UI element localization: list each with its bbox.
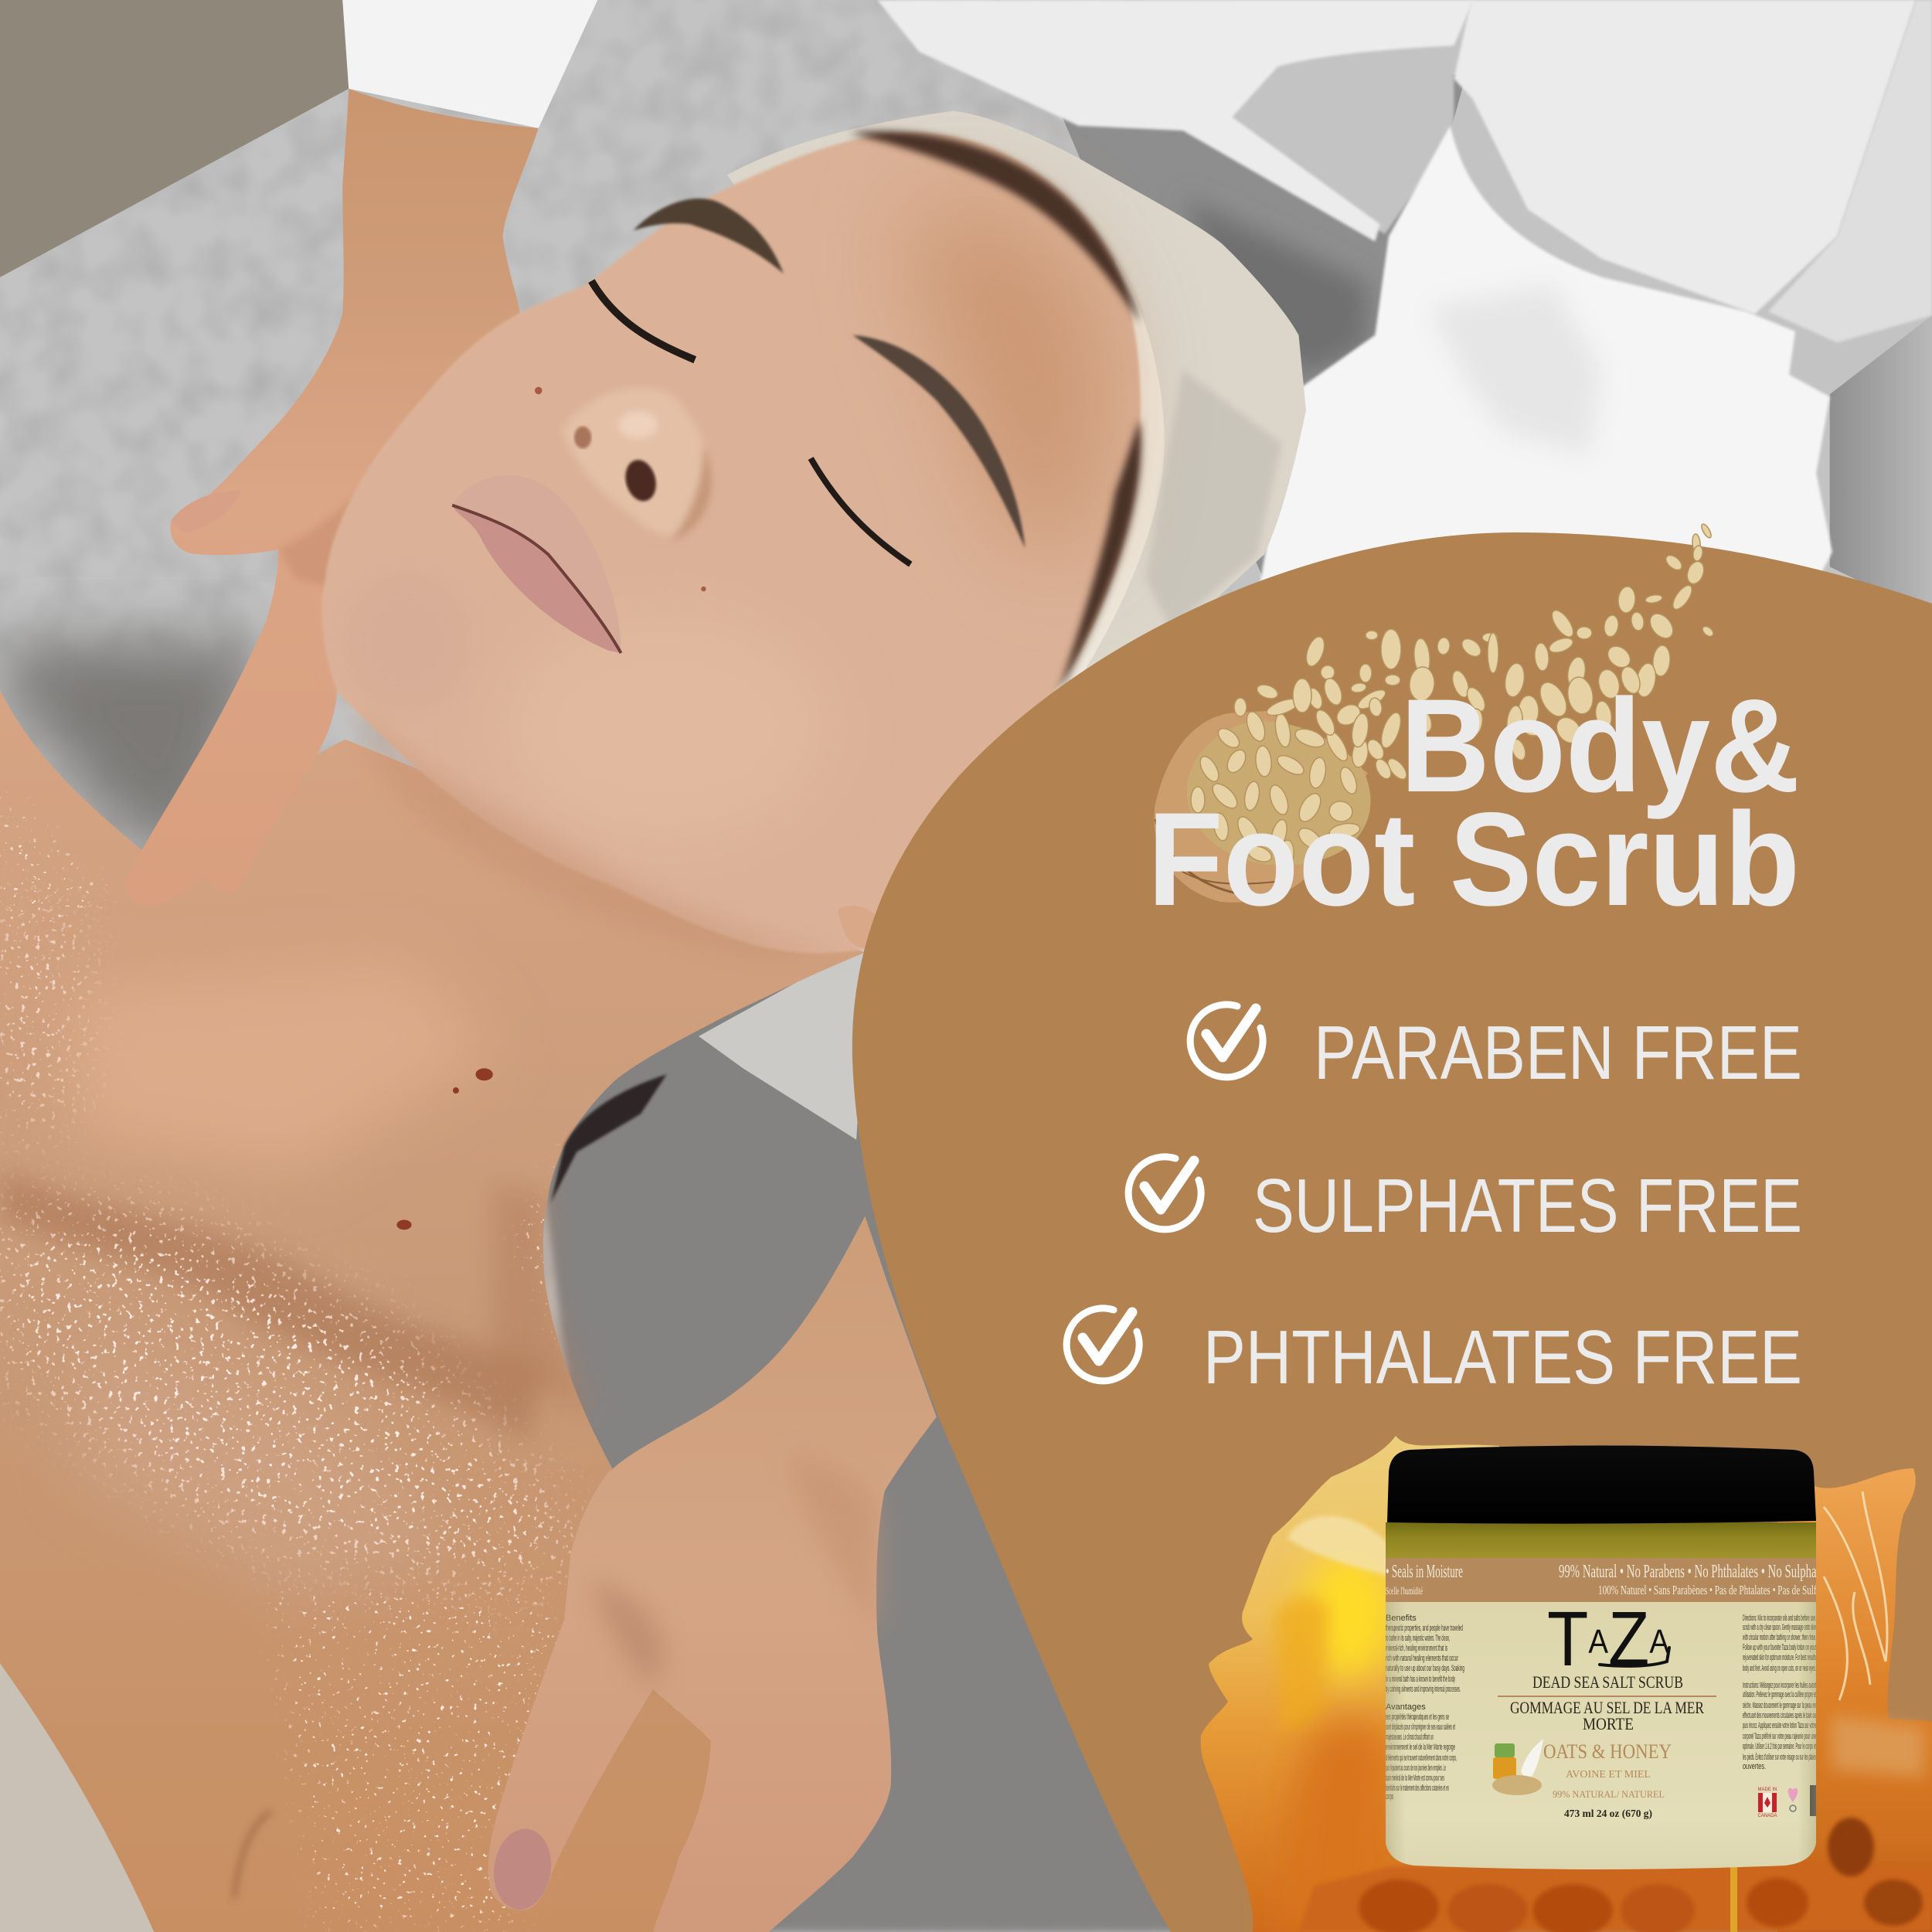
label band: • Seals in Moisture — [1386, 1562, 1463, 1582]
jar body: d'éléments qui se trouvent naturellement dans notre corps, — [1386, 1753, 1457, 1763]
French product name: GOMMAGE AU SEL DE LA MER — [1510, 1698, 1704, 1717]
coat lower sleeve — [1257, 126, 1832, 616]
speckles sparse — [0, 788, 740, 1932]
neck highlight — [74, 961, 493, 1171]
body: neck, chest and shoulder — [0, 690, 865, 1932]
Taza logo: A — [1649, 1623, 1670, 1661]
collarbone shadow — [0, 1171, 543, 1441]
oats in the bowl — [1187, 709, 1371, 869]
face — [322, 133, 1141, 953]
product jar — [1383, 1445, 1830, 1872]
honeycomb right — [1777, 1468, 1932, 1932]
masseuse lower hand and arm — [488, 1216, 937, 1932]
chest crease — [234, 1811, 271, 1897]
chest mid light — [74, 1331, 468, 1602]
masseuse sleeve — [342, 0, 597, 128]
jar body: qui s'épuisent au cours de nos journées bien remplies. Le — [1386, 1764, 1446, 1773]
Taza logo — [1547, 1596, 1670, 1682]
jar edge shading — [1383, 1602, 1820, 1872]
jar body: bienfaits sur le traitement des affections cutanées et en — [1386, 1784, 1449, 1793]
claim: sulphates free — [1128, 1157, 1802, 1248]
nostril left — [574, 427, 591, 448]
eyebrow right — [852, 335, 1026, 549]
jar body: sont déplacés pour s'imprégner de ses eaux salées et — [1386, 1723, 1455, 1732]
Made in Canada flag: MADE IN — [1757, 1787, 1777, 1792]
net weight: 473 ml 24 oz (670 g) — [1564, 1808, 1652, 1820]
jar body: naturally to use up about our busy days. Soaking — [1386, 1664, 1464, 1673]
coat recess deepest — [1183, 197, 1368, 376]
honey drip — [1730, 1862, 1737, 1932]
chin tone — [338, 566, 474, 715]
jar body: bain minéral de la Mer Morte est connu pour ses — [1386, 1774, 1444, 1783]
scrub speckles — [0, 788, 740, 1932]
flying oats — [1234, 522, 1715, 782]
natural claim: 99% NATURAL/ NATUREL — [1553, 1788, 1665, 1800]
label band: Scelle l'humidité — [1386, 1586, 1423, 1597]
left label column: Avantages — [1386, 1702, 1426, 1712]
coat right strip — [1768, 0, 1932, 342]
lips — [452, 475, 621, 653]
towel mottling — [0, 0, 1232, 1932]
product name: DEAD SEA SALT SCRUB — [1532, 1672, 1683, 1692]
neck right shading — [493, 1183, 591, 1417]
ear — [838, 906, 886, 948]
eyebrow left — [634, 199, 784, 274]
right label column — [1743, 1614, 1816, 1771]
illustration: honeycomb behind jar — [1201, 1436, 1932, 1932]
jar body: to bathe in its salty, majestic waters. The clean, — [1386, 1634, 1450, 1643]
closed eye right — [811, 458, 910, 564]
wrap ribbed inner band — [1047, 259, 1165, 709]
claim: sulphates free: SULPHATES FREE — [1253, 1163, 1802, 1248]
jar body: ses propriétés thérapeutiques et les gens se — [1386, 1713, 1449, 1722]
jar lid — [1387, 1445, 1816, 1524]
moles on face — [535, 387, 706, 591]
jaw shadow — [357, 709, 850, 957]
jar body: environnement le sel de la Mer Morte regorge — [1386, 1743, 1455, 1752]
variant French: AVOINE ET MIEL — [1566, 1769, 1651, 1781]
left label column — [1386, 1614, 1464, 1801]
left label column: mineral-rich, healing environment that is — [1386, 1644, 1447, 1653]
comb orange mid — [1283, 1722, 1391, 1932]
arm shade — [788, 1454, 877, 1633]
Made in Canada flag: CANADA — [1757, 1814, 1777, 1818]
white wrap over chest — [0, 1663, 154, 1932]
variant name: OATS & HONEY — [1543, 1740, 1672, 1763]
moles — [396, 1068, 493, 1230]
towel shadow beside shoulder — [0, 641, 266, 850]
jar body: therapeutic properties, and people have traveled — [1386, 1624, 1463, 1633]
dark towel under arm — [530, 937, 1183, 1932]
hair — [850, 131, 1141, 696]
label rule — [1498, 1696, 1716, 1697]
fingernail — [172, 491, 242, 532]
title line 2: Foot Scrub — [1148, 785, 1800, 934]
nose highlight — [618, 412, 658, 439]
jar cream — [1383, 1602, 1820, 1872]
background wall — [0, 0, 357, 277]
jar body — [1383, 1519, 1830, 1872]
closed eye left — [591, 281, 695, 360]
lower hand nail — [488, 1825, 556, 1913]
wrap shading — [1146, 369, 1281, 628]
wooden bowl — [1154, 711, 1368, 903]
claim: paraben free: PARABEN FREE — [1314, 1010, 1802, 1095]
Taza logo: Z — [1608, 1596, 1649, 1682]
far right grey — [1830, 315, 1932, 616]
thumb shade — [278, 394, 431, 591]
French product name — [1510, 1698, 1704, 1733]
icon: check circle — [1190, 1005, 1263, 1077]
comb light top — [1287, 1515, 1391, 1577]
label band — [1383, 1558, 1830, 1602]
head wrap towel — [727, 111, 1306, 709]
left label column: corps — [1386, 1792, 1393, 1801]
jar body: by calming ailments and improving internal processes. — [1386, 1685, 1461, 1694]
title — [1148, 672, 1800, 934]
comb cell veins right — [1824, 1492, 1887, 1700]
neck shadow crescent — [551, 1074, 667, 1202]
left label column: majestueuses. Le climat chaud offrant un — [1386, 1733, 1434, 1742]
icon: cruelty free heart — [1788, 1788, 1798, 1811]
icon: check circle — [1128, 1157, 1201, 1230]
speckles dense — [0, 875, 590, 1621]
honey amber strand — [1275, 1597, 1329, 1731]
coat upper sleeve — [1454, 0, 1916, 315]
panel: brown product blob — [852, 532, 1932, 1932]
honeycomb bottom cells — [1298, 1818, 1932, 1932]
towel under neck — [699, 943, 869, 1140]
honeycomb left — [1201, 1436, 1499, 1932]
Taza logo: A — [1588, 1623, 1609, 1661]
honey glow — [1302, 1549, 1395, 1681]
coat grey fold — [1196, 46, 1454, 234]
French product name: MORTE — [1583, 1714, 1634, 1733]
claim: phthalates free — [1066, 1308, 1802, 1400]
cheek light — [505, 616, 825, 838]
left label column: Benefits — [1386, 1614, 1417, 1623]
title line 1: Body& — [1400, 672, 1800, 820]
right label column: ouvertes. — [1743, 1762, 1766, 1771]
Made in Canada flag — [1757, 1787, 1777, 1818]
nose shading — [562, 388, 712, 535]
nostril right — [621, 457, 661, 505]
knuckle shadow — [591, 1577, 665, 1689]
jar body: rich with natural healing elements that occur — [1386, 1654, 1458, 1663]
claim: paraben free — [1190, 1005, 1802, 1095]
jar body: in a mineral bath has a known to benefit the body — [1386, 1675, 1455, 1684]
forehead warm tone — [912, 203, 1107, 566]
coat fold shadow — [1429, 284, 1602, 456]
coat top panel — [877, 0, 1474, 242]
coat dark recess — [1060, 74, 1466, 591]
white coat — [877, 0, 1932, 616]
masseuse upper hand — [124, 89, 539, 905]
Taza logo: T — [1547, 1596, 1588, 1682]
comb pale tan right — [1832, 1716, 1924, 1777]
claim: phthalates free: PHTHALATES FREE — [1203, 1315, 1802, 1400]
nose side shadow — [672, 444, 713, 543]
illustration: oat bowl and flying oats — [1154, 522, 1715, 903]
icon: honey jar milk and oats — [1492, 1739, 1543, 1795]
icon: check circle — [1066, 1308, 1139, 1381]
